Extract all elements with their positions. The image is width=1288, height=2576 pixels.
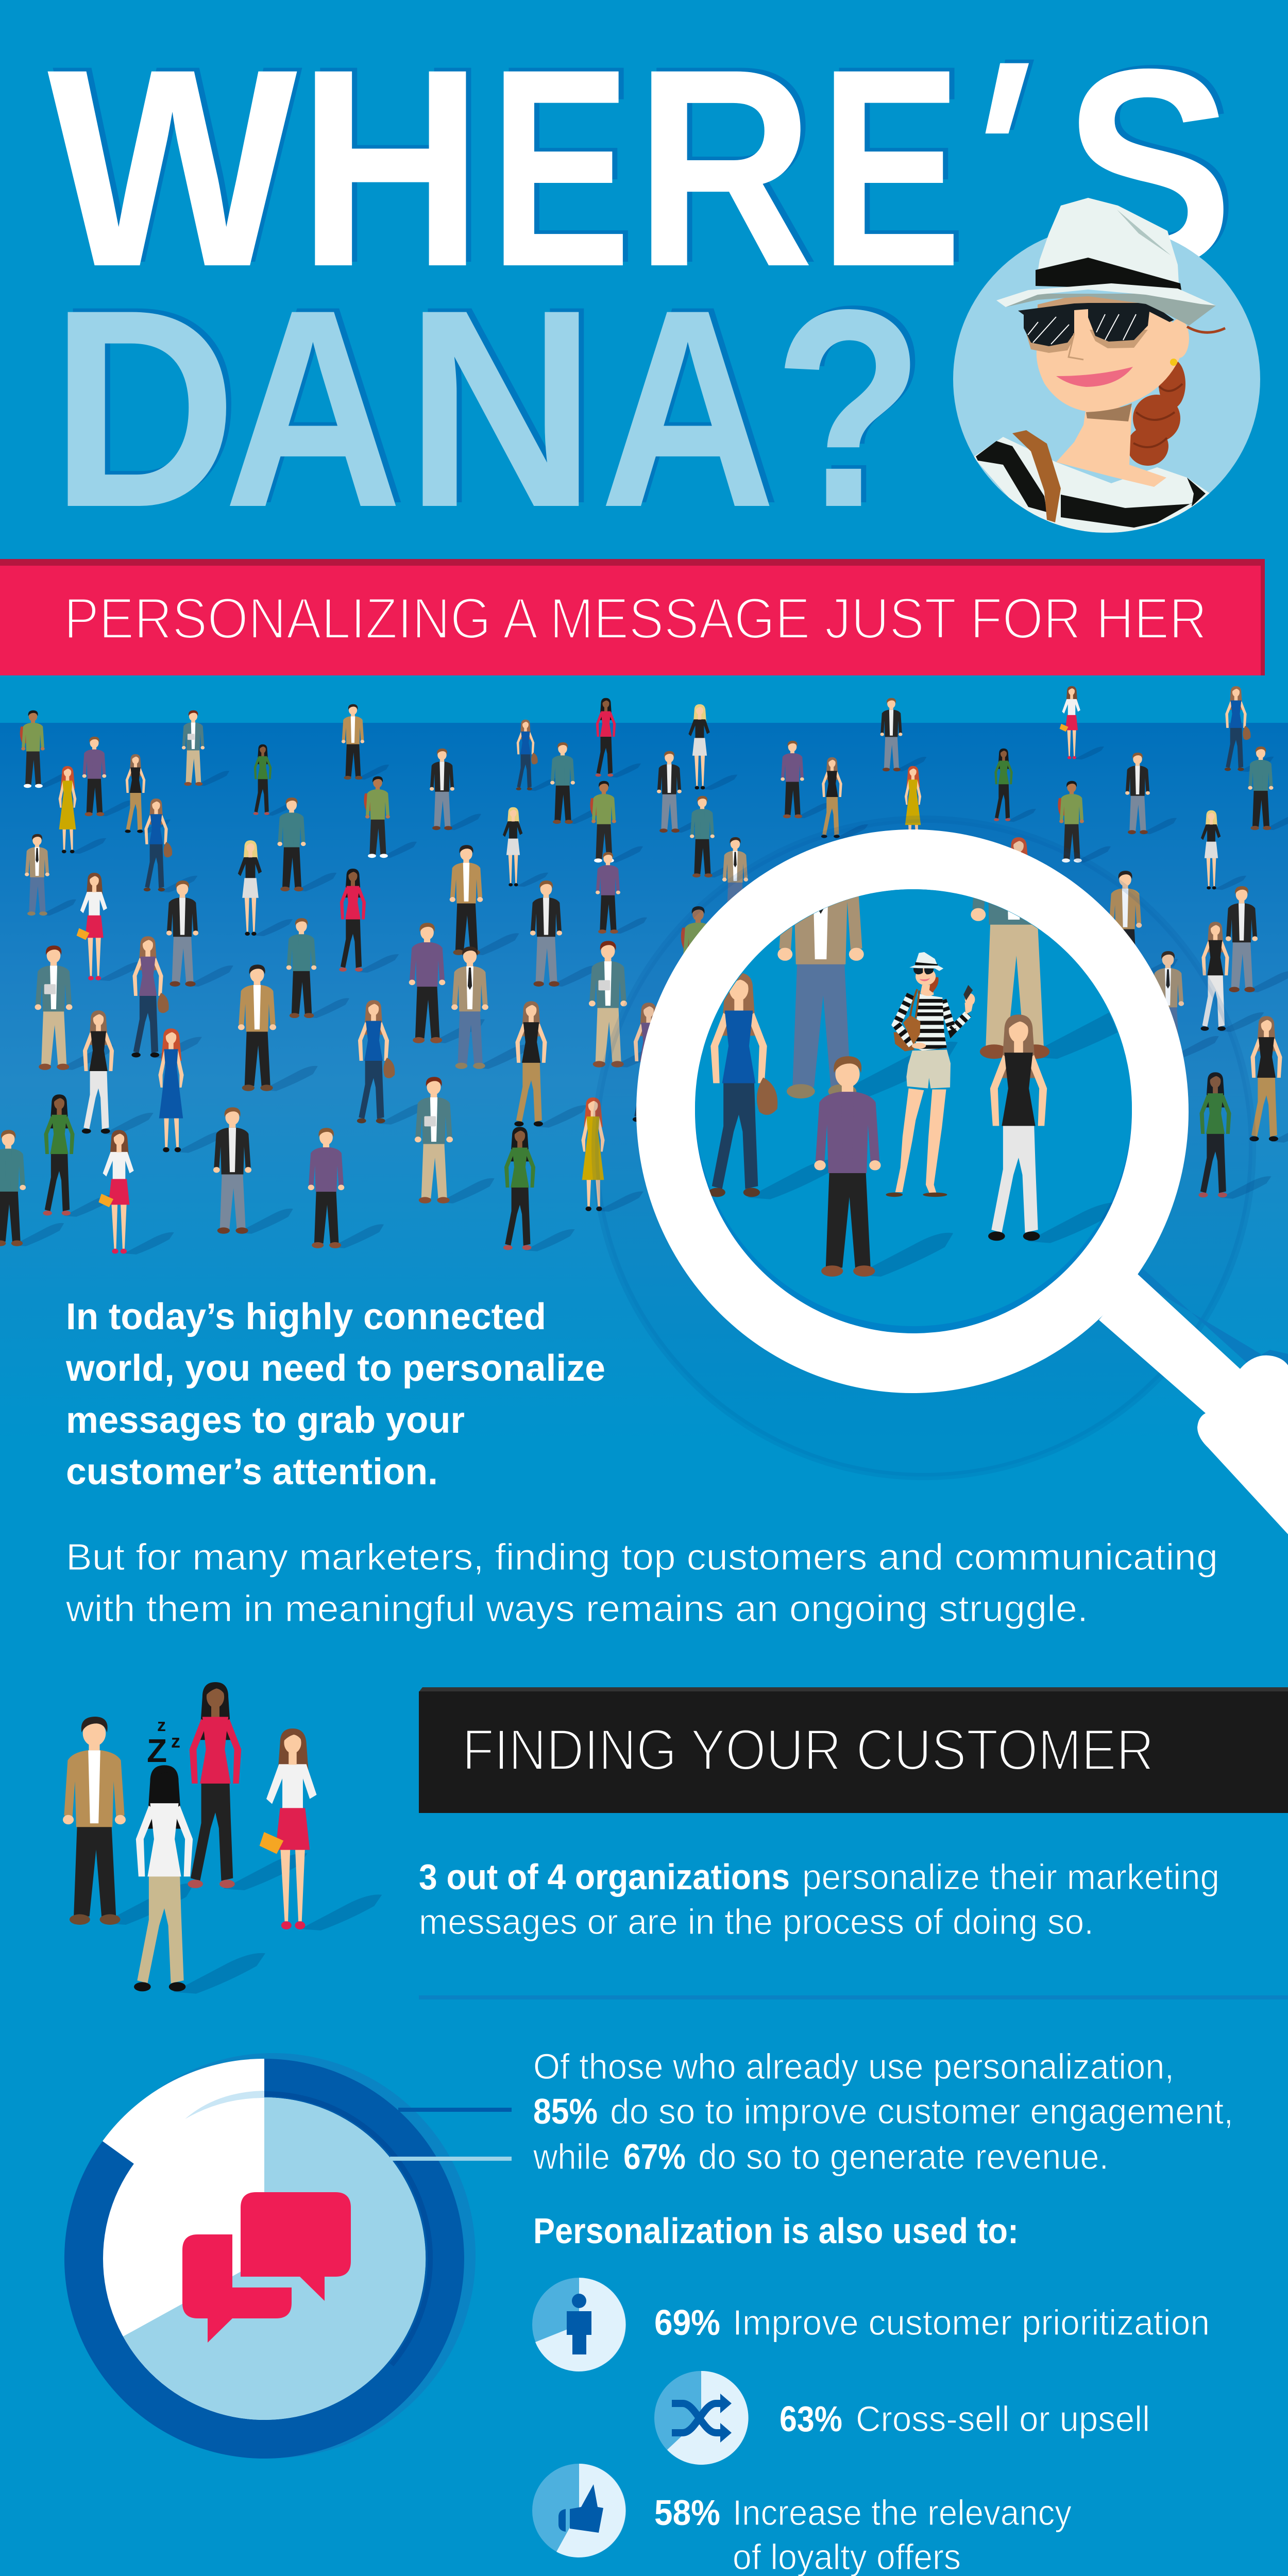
- handle: [1099, 1274, 1288, 1534]
- sleeping Z letters: [147, 1716, 180, 1769]
- title shadow: E: [825, 7, 967, 321]
- heading: finding your customer: FINDING YOUR CUSTOMER: [462, 1718, 1154, 1782]
- stat: 3 out of 4 organizations: 3 out of 4 organizations: [419, 1857, 790, 1897]
- Dana among the crowd: [886, 952, 975, 1197]
- intro text bold: messages to grab your: [66, 1400, 465, 1441]
- stat: 3 out of 4 organizations: [419, 1857, 1219, 1942]
- sleeping Z letters: z: [171, 1731, 180, 1752]
- title: DANA?: D: [50, 251, 237, 566]
- magnifying glass: [636, 773, 1288, 1534]
- intro text bold: customer’s attention.: [66, 1451, 438, 1493]
- stat text: 85% and 67%: do so to generate revenue.: [698, 2137, 1109, 2177]
- title: DANA?: A: [224, 251, 402, 566]
- stat: 69% improve customer prioritization: 69%: [654, 2302, 720, 2343]
- title shadow: A: [605, 247, 781, 562]
- handle shadow: [1133, 1268, 1288, 1370]
- icon: shuffle in pie: [654, 2371, 749, 2465]
- title shadow: S: [1069, 7, 1239, 321]
- stat text: 85% and 67%: [533, 2046, 1233, 2177]
- stat: 58% relevancy: of loyalty offers: [733, 2537, 961, 2576]
- intro text regular: with them in meaningful ways remains an ongoing struggle.: [65, 1588, 1088, 1630]
- stat: 69% improve customer prioritization: Improve customer prioritization: [733, 2302, 1210, 2343]
- stat: 63% cross-sell: Cross-sell or upsell: [856, 2399, 1150, 2439]
- title: WHERE'S: S: [1063, 10, 1233, 325]
- title shadow: E: [495, 7, 636, 321]
- sleeping Z letters: z: [157, 1716, 166, 1735]
- title shadow: D: [56, 247, 242, 562]
- title shadow: [56, 247, 929, 562]
- crowd background gradient: [0, 723, 1288, 1444]
- banner text: PERSONALIZING A MESSAGE JUST FOR HER: [64, 586, 1207, 651]
- title: WHERE'S: E: [820, 10, 962, 325]
- magnified people: [709, 896, 1117, 1277]
- title: DANA?: A: [600, 251, 776, 566]
- title: WHERE'S: E: [489, 10, 631, 325]
- title: DANA?: [50, 247, 929, 566]
- connector lines: [390, 2108, 512, 2161]
- crowd of people: [0, 686, 1288, 1255]
- avatar: Dana portrait in circle: [953, 198, 1260, 536]
- lens ring: [636, 829, 1189, 1393]
- stat: 63% cross-sell: 63%: [779, 2399, 842, 2439]
- intro text regular: [65, 1537, 1218, 1630]
- title: WHERE'S: [47, 0, 1239, 325]
- stat: 63% cross-sell: [654, 2371, 1150, 2465]
- woman in white pants: [988, 1014, 1120, 1243]
- heading: finding your customer: [419, 1687, 1288, 1813]
- title shadow: N: [410, 247, 602, 562]
- title shadow: A: [229, 247, 408, 562]
- subheading: personalization also used to: Personalization is also used to:: [533, 2211, 1019, 2251]
- stat: 69% improve customer prioritization: [532, 2278, 1210, 2371]
- stat text: 85% and 67%: Of those who already use personalization,: [533, 2046, 1174, 2087]
- title shadow: [53, 0, 1239, 321]
- man in teal jacket: [971, 897, 1117, 1059]
- donut chart: 85% and 67%: [64, 2053, 512, 2459]
- title: DANA?: N: [405, 251, 597, 566]
- banner: personalizing a message: [0, 559, 1265, 675]
- man in purple shirt: [810, 1056, 953, 1277]
- intro text bold: world, you need to personalize: [65, 1348, 605, 1389]
- title: WHERE'S: R: [635, 10, 814, 325]
- title shadow: ?: [778, 247, 929, 562]
- title shadow: W: [53, 7, 305, 321]
- icon: person in pie: [532, 2278, 626, 2371]
- stat text: 85% and 67%: 67%: [623, 2137, 686, 2177]
- title shadow: ': [930, 0, 1061, 313]
- title shadow: H: [303, 7, 488, 321]
- group of people chatting: [59, 1682, 382, 1994]
- intro text bold: [65, 1296, 605, 1493]
- icon: thumbs up in pie: [532, 2464, 626, 2557]
- sleeping Z letters: Z: [147, 1732, 167, 1769]
- intro text bold: In today’s highly connected: [66, 1296, 546, 1337]
- title: WHERE'S: W: [47, 10, 300, 325]
- title shadow: R: [640, 7, 819, 321]
- icon: speech bubbles: [182, 2192, 351, 2343]
- woman in blue top: [709, 973, 839, 1199]
- stat: 58% relevancy: 58%: [654, 2493, 720, 2533]
- stat: 3 out of 4 organizations: personalize their marketing: [802, 1857, 1219, 1897]
- stat text: 85% and 67%: do so to improve customer engagement,: [610, 2091, 1233, 2131]
- magnifier shadow: [595, 819, 1252, 1477]
- stat text: 85% and 67%: while: [533, 2137, 610, 2177]
- stat text: 85% and 67%: 85%: [533, 2091, 598, 2131]
- stat: 3 out of 4 organizations: messages or are in the process of doing so.: [419, 1902, 1094, 1942]
- stat: 58% relevancy: [532, 2464, 1072, 2576]
- title: WHERE'S: ': [925, 2, 1056, 317]
- title: DANA?: ?: [773, 251, 924, 566]
- stat: 58% relevancy: Increase the relevancy: [733, 2493, 1072, 2533]
- title: WHERE'S: H: [298, 10, 483, 325]
- intro text regular: But for many marketers, finding top customers and communicating: [66, 1537, 1218, 1578]
- man in beige blazer: [777, 896, 958, 1098]
